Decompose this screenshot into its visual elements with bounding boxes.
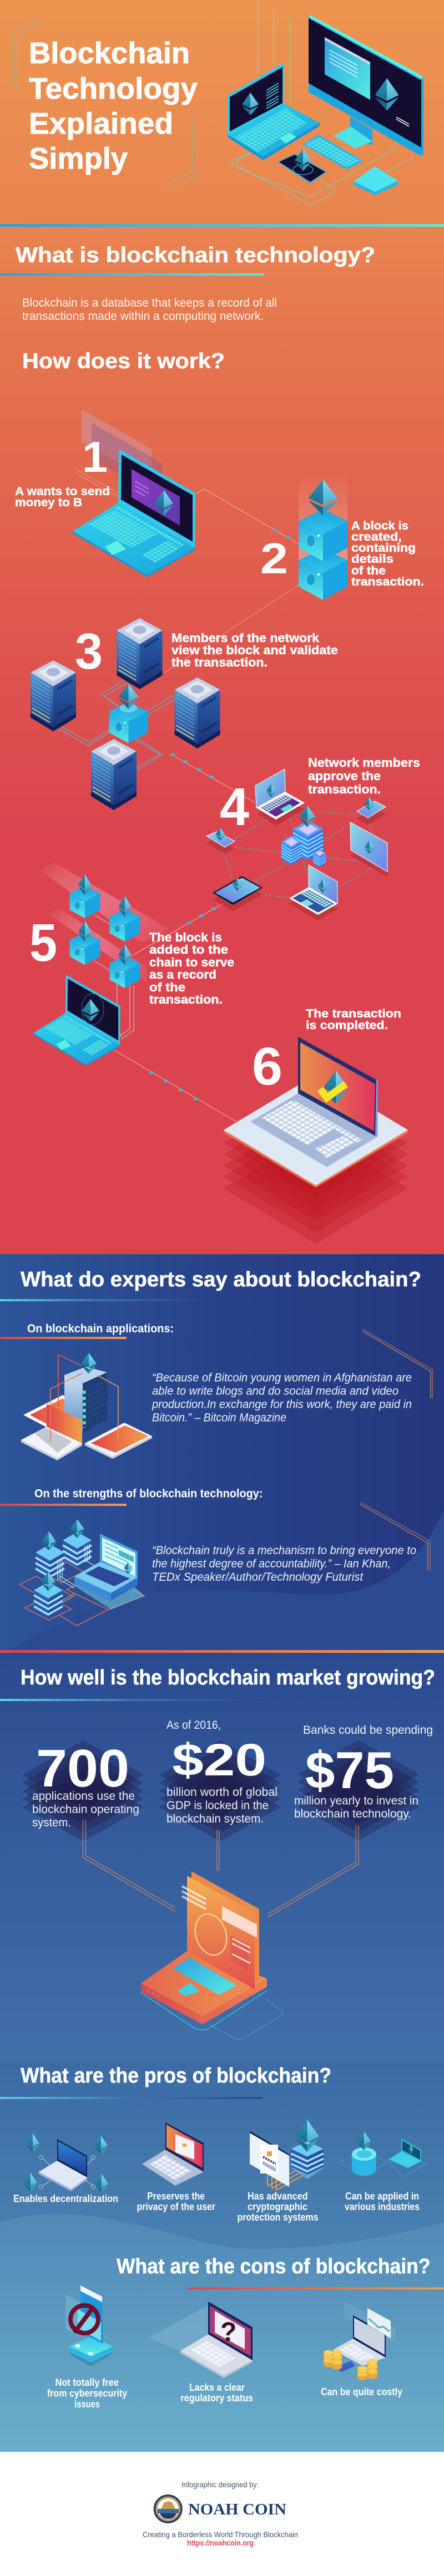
quote 1: “Because of Bitcoin young women in Afghanistan are <box>152 1371 412 1384</box>
icon: server left <box>31 660 76 731</box>
logo: emblem <box>154 2494 183 2523</box>
label <box>345 2191 420 2212</box>
icon: laptop with question mark <box>149 2302 253 2378</box>
text: step 3: view the block and validate <box>171 643 338 657</box>
number 4: 4 <box>220 777 249 837</box>
underline <box>0 1299 194 1301</box>
icon: tablet <box>213 876 263 905</box>
icon: laptop top <box>255 769 305 819</box>
text: step 5: as a record <box>149 968 216 981</box>
icon: laptop with check <box>250 1037 378 1167</box>
quote 1: Bitcoin.” – Bitcoin Magazine <box>152 1411 286 1424</box>
connectors: step lines <box>113 489 299 1122</box>
text: step 3: the transaction. <box>171 655 268 669</box>
stat: $75 <box>294 1724 433 1820</box>
quote 2: “Blockchain truly is a mechanism to bring everyone to <box>152 1544 416 1557</box>
label: Lacks a clear <box>189 2382 245 2393</box>
text: step 5: chain to serve <box>149 955 234 969</box>
text: step 5: of the <box>149 980 185 994</box>
label: Has advanced <box>248 2191 308 2202</box>
con: regulatory <box>149 2302 253 2404</box>
connector lines <box>83 1820 359 1917</box>
background <box>0 2452 444 2576</box>
dashed network <box>223 811 377 898</box>
pro: cryptographic protection <box>238 2120 324 2223</box>
pro: privacy <box>137 2122 215 2212</box>
text: step 6: is completed. <box>306 1019 388 1032</box>
icon: laptop with window <box>73 449 195 577</box>
text: step 5: The block is <box>149 930 222 944</box>
underline <box>0 2097 263 2099</box>
icon: standing screen <box>350 822 387 872</box>
icon: laptop <box>33 975 120 1066</box>
icon: server stacks <box>281 806 326 867</box>
stat: $20 <box>167 1719 278 1825</box>
quote 2: the highest degree of accountability.” – Ian Khan, <box>152 1557 391 1570</box>
step 3 <box>31 618 338 810</box>
underline <box>0 1504 127 1506</box>
text: step 2: transaction. <box>351 576 424 588</box>
text: definition: Blockchain is a database that keeps a record of all <box>22 297 277 309</box>
text: step 2: containing <box>351 542 416 554</box>
icon: cylinder and laptop <box>340 2132 426 2177</box>
icon: tower with tablets <box>21 1353 152 1460</box>
icon: server top <box>117 618 162 689</box>
icon: stacks and laptop <box>19 1519 144 1626</box>
icon: laptop with coins <box>324 2301 395 2380</box>
stat: $75: blockchain technology. <box>294 1808 411 1820</box>
icon: laptop with question mark: ? <box>220 2318 236 2347</box>
underline <box>0 273 264 276</box>
text: step 1 <box>15 485 110 509</box>
icon: server right <box>175 678 220 749</box>
quote 2: TEDx Speaker/Author/Technology Futurist <box>152 1570 364 1584</box>
text: step 2: of the <box>351 564 386 577</box>
panel: pros <box>0 2064 426 2223</box>
label <box>181 2382 253 2404</box>
con: costly <box>321 2301 402 2397</box>
label: protection systems <box>238 2212 319 2223</box>
stat: 700: blockchain operating <box>32 1803 139 1816</box>
text: definition: transactions made within a computing network. <box>22 310 264 323</box>
stat: $20: blockchain system. <box>167 1813 264 1825</box>
text: step 6 <box>306 1007 401 1032</box>
platform shadows <box>224 1087 408 1244</box>
stat: $75: million yearly to invest in <box>294 1794 418 1808</box>
text: definition <box>22 297 277 323</box>
number 1: 1 <box>82 432 108 481</box>
quote 1: able to write blogs and do social media and video <box>152 1384 398 1397</box>
pro: industries <box>340 2132 426 2212</box>
stat: $20: GDP is locked in the <box>167 1799 269 1812</box>
background wave <box>0 1508 444 1655</box>
label <box>47 2377 127 2410</box>
device shadows <box>206 803 389 920</box>
title: Blockchain <box>29 37 190 70</box>
icon: stacked blocks <box>299 475 347 600</box>
logo: wordmark: NOAH COIN <box>188 2501 286 2518</box>
title <box>29 37 198 175</box>
label: Can be applied in <box>345 2191 419 2202</box>
text: step 2: created, <box>351 531 402 543</box>
icon: server bottom <box>91 739 137 810</box>
icon: laptop bottom <box>289 865 337 915</box>
icon: laptop with nodes <box>24 2134 108 2193</box>
label: Preserves the <box>147 2191 205 2202</box>
platform <box>224 1075 408 1188</box>
stat: $20: $20 <box>172 1735 266 1785</box>
text: step 4: Network members <box>308 756 420 770</box>
icon: laptop with lock <box>142 2122 204 2186</box>
heading: pros: What are the pros of blockchain? <box>21 2064 331 2088</box>
label: Can be quite costly <box>321 2386 402 2397</box>
heading: what is blockchain: What is blockchain technology? <box>16 243 375 267</box>
text: step 3: Members of the network <box>171 631 320 645</box>
label: cryptographic <box>248 2201 307 2212</box>
text: step 6: The transaction <box>306 1007 401 1020</box>
deco lines <box>360 1329 432 1570</box>
heading: cons: What are the cons of blockchain? <box>117 2255 431 2278</box>
text: step 2: A block is <box>351 520 408 532</box>
text: step 1: money to B <box>15 496 82 509</box>
step 5 <box>29 863 234 1066</box>
number 6: 6 <box>252 1037 282 1096</box>
icon: phone right <box>357 797 386 818</box>
icon: phone <box>278 149 327 184</box>
title: Simply <box>29 142 128 175</box>
stat: $20: billion worth of global <box>167 1786 278 1799</box>
number 3: 3 <box>75 623 103 680</box>
text: step 4: transaction. <box>308 782 381 796</box>
subheading: applications: On blockchain applications: <box>27 1322 174 1335</box>
icon: phone with prohibition <box>65 2285 113 2366</box>
icon: phone left <box>206 828 235 847</box>
light beams <box>40 863 170 982</box>
label <box>137 2191 215 2212</box>
label: issues <box>74 2399 100 2410</box>
quote 1: production.In exchange for this work, they are paid in <box>152 1397 412 1411</box>
step 4 <box>206 756 420 920</box>
step 6 <box>224 1007 408 1244</box>
heading: how does it work: How does it work? <box>22 349 225 373</box>
quote 1 <box>152 1371 412 1424</box>
text: step 5: added to the <box>149 943 228 956</box>
con: cybersecurity <box>47 2285 127 2410</box>
text: designed by: Infographic designed by: <box>181 2480 259 2489</box>
band: pros background <box>0 2063 444 2249</box>
text: url: https://noahcoin.org <box>187 2538 254 2547</box>
heading: experts: What do experts say about blockchain? <box>21 1268 421 1291</box>
subheading: strengths: On the strengths of blockchain technology: <box>34 1487 263 1500</box>
decorative bracket left <box>13 18 198 189</box>
label: various industries <box>345 2201 420 2212</box>
stat: $75: $75 <box>305 1741 394 1799</box>
icon: keyboard <box>302 135 363 170</box>
label: privacy of the user <box>137 2201 215 2212</box>
underline <box>0 1337 127 1339</box>
panel: market and pros cons background <box>0 1652 444 2452</box>
text: step 5: transaction. <box>149 992 223 1006</box>
icon: central block <box>109 684 148 743</box>
text: step 2 <box>351 520 424 588</box>
panel: hero <box>13 0 423 205</box>
underline <box>0 1699 264 1701</box>
ghost panels <box>75 409 162 498</box>
background: orange-to-red panel <box>0 0 444 1254</box>
icon: monitor <box>309 15 423 156</box>
panel: cons <box>47 2255 444 2410</box>
text: step 4 <box>308 756 420 796</box>
text: step 1: A wants to send <box>15 485 110 498</box>
title: Explained <box>29 107 173 140</box>
title: Technology <box>29 72 198 105</box>
label: regulatory status <box>181 2392 253 2404</box>
icon: laptop <box>228 63 320 160</box>
text: step 3 <box>171 631 338 669</box>
label: Enables decentralization <box>13 2193 118 2205</box>
quote 2 <box>152 1544 416 1584</box>
background <box>0 1254 444 1653</box>
label <box>238 2191 319 2223</box>
text: tagline: Creating a Borderless World Through Blockchain <box>143 2530 298 2539</box>
stat: 700 <box>32 1739 139 1829</box>
text: step 4: approve the <box>308 769 381 783</box>
text: step 5 <box>149 930 234 1006</box>
icon: blocks chain <box>70 874 140 988</box>
icon: router <box>354 166 398 195</box>
divider: hero <box>0 224 444 227</box>
panel: market growth <box>0 1666 435 2040</box>
divider: experts <box>0 1650 444 1653</box>
text: step 2: details <box>351 553 393 566</box>
stat: 700: 700 <box>36 1739 129 1798</box>
icon: browser with stack <box>250 2120 324 2190</box>
step 2 <box>260 475 424 600</box>
stat: $20: As of 2016, <box>167 1719 221 1732</box>
network lines <box>59 681 175 770</box>
underline <box>188 2288 444 2289</box>
icon: orange laptop <box>140 1871 282 2040</box>
pro: decentralization <box>13 2134 118 2205</box>
chain lines <box>94 915 134 1039</box>
panel: footer <box>0 2452 444 2576</box>
number 5: 5 <box>29 913 57 973</box>
stat: 700: system. <box>32 1816 71 1829</box>
label: from cybersecurity <box>47 2388 127 2399</box>
label: Not totally free <box>56 2377 119 2388</box>
hexagon stacks <box>22 1740 420 1841</box>
panel: experts <box>0 1254 444 1655</box>
stat: 700: applications use the <box>32 1790 135 1803</box>
number 2: 2 <box>260 534 288 583</box>
stat: $75: Banks could be spending <box>303 1724 433 1737</box>
illustration: devices with ethereum <box>228 0 423 205</box>
step 1 <box>15 409 195 577</box>
